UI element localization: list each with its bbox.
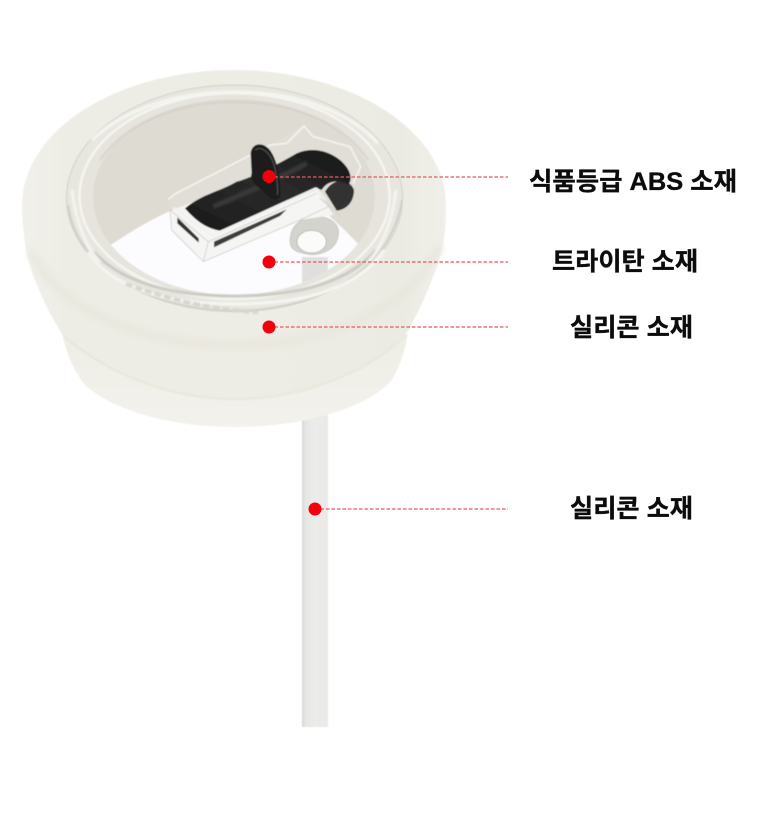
holder edges [170, 193, 340, 262]
marker dot: mouthpiece [262, 170, 276, 183]
label: food-grade ABS: 식품등급 ABS 소재 [529, 168, 737, 196]
transparent tritan lid rim [66, 85, 402, 311]
marker dot: ring [262, 320, 276, 334]
marker dot: lid [262, 256, 276, 268]
white floor [111, 200, 358, 295]
holder dark front reflection [214, 209, 287, 247]
leader line 3 [269, 326, 508, 328]
label: silicone ring: 실리콘 소재 [570, 314, 693, 342]
lid inner well [93, 99, 375, 295]
plug rear inside holder [325, 181, 354, 211]
leader line 1 [269, 176, 508, 178]
ring step shadow [64, 334, 406, 399]
straw seen through lid [302, 256, 328, 283]
label: silicone straw: 실리콘 소재 [570, 495, 693, 523]
product artwork [22, 70, 446, 727]
lid glass highlights [68, 200, 402, 311]
label: tritan: 트라이탄 소재 [552, 248, 698, 276]
straw tube [302, 415, 328, 727]
leader line 4 [315, 508, 508, 510]
clear holder back [168, 125, 362, 262]
black silicone plug [185, 150, 351, 231]
leader line 2 [269, 261, 508, 263]
illustration: straw lid [22, 70, 508, 727]
plug flap [251, 144, 280, 200]
holder dark left reflection [177, 217, 199, 243]
plug highlight [213, 163, 307, 207]
holder back rim [168, 126, 361, 199]
holder front face [171, 190, 333, 262]
holder top rim [173, 188, 326, 236]
straw collar [290, 217, 339, 255]
marker dot: straw [308, 502, 322, 516]
food-grade ABS mouthpiece in clear holder, drawn in zoomed coordinates [168, 125, 362, 262]
silicone ring [22, 70, 446, 398]
ring face edge highlight [30, 245, 440, 345]
lid lower body [62, 333, 408, 427]
